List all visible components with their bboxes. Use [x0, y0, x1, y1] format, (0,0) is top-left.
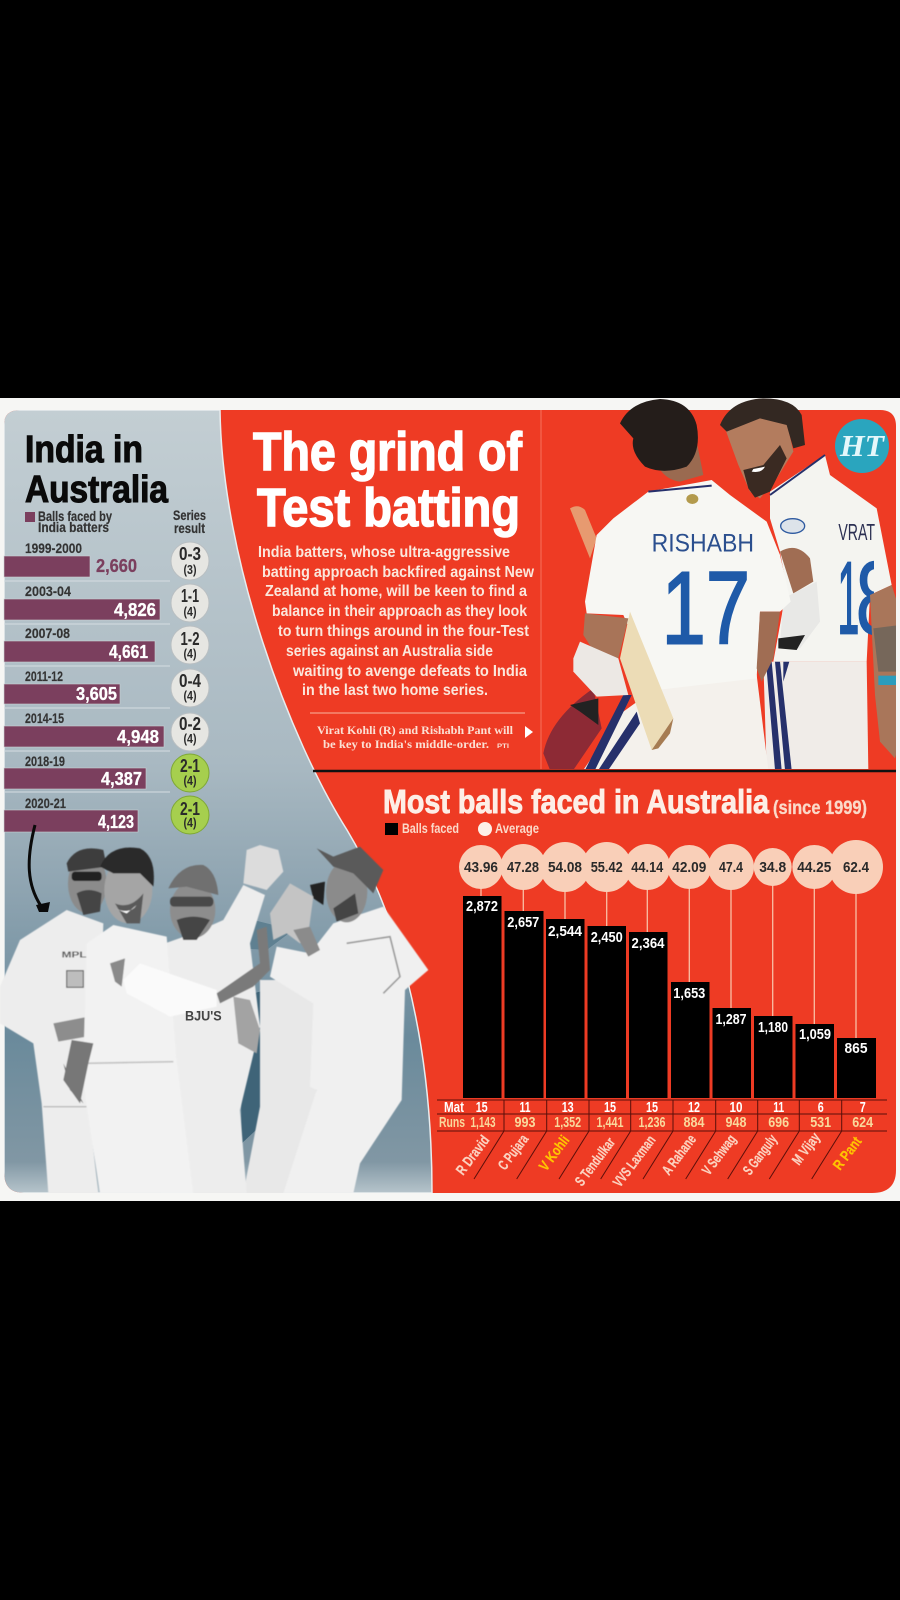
bar chart: balls faced [463, 896, 876, 1098]
arrow: from bars to players [29, 825, 50, 912]
bar chart: balls faced: 2,544 [548, 923, 583, 940]
series results [171, 542, 209, 834]
player names [453, 1130, 866, 1190]
text block: intro: waiting to avenge defeats to India [292, 663, 527, 680]
player names: S Tendulkar [572, 1135, 619, 1189]
player names: R Dravid [453, 1133, 493, 1178]
text block: intro: batting approach backfired against New [262, 564, 535, 581]
table: matches and runs: 11 [773, 1100, 784, 1116]
text block: intro: series against an Australia side [286, 643, 493, 660]
jersey number: 18: 1 [837, 539, 859, 655]
divider lines [540, 410, 542, 769]
average values: 34.8 [759, 859, 786, 876]
table: matches and runs: 7 [860, 1100, 866, 1116]
table: matches and runs: 6 [818, 1100, 824, 1116]
figure: Rishabh Pant: RISHABH [652, 530, 754, 558]
figure: Rishabh Pant [543, 399, 791, 770]
series results: 2-1 [180, 799, 200, 819]
table: matches and runs: 1,143 [470, 1115, 496, 1131]
panel: The grind of Test batting [253, 422, 535, 751]
heading: The grind of Test batting: The grind of [253, 422, 523, 482]
legend: series result: Series [173, 508, 206, 523]
average values: 54.08 [548, 859, 582, 876]
bar chart: balls faced by series: 2,660 [96, 555, 137, 576]
heading: India in Australia: Australia [25, 469, 169, 511]
figure: Rishabh Pant: 17 [662, 549, 750, 665]
panel: Most balls faced in Australia [383, 783, 887, 1190]
average values: 42.09 [672, 859, 706, 876]
heading: The grind of Test batting: Test batting [257, 478, 520, 538]
heading: India in Australia: India in [25, 429, 143, 471]
table: matches and runs: 948 [726, 1115, 746, 1131]
legend: chart [385, 821, 539, 836]
bar chart: balls faced by series: 4,661 [109, 641, 148, 662]
table: matches and runs: 15 [646, 1100, 658, 1116]
caption: photo [317, 725, 533, 751]
table: matches and runs: 531 [810, 1115, 831, 1131]
series results: (4) [184, 816, 196, 830]
series results: 1-1 [181, 586, 199, 606]
bar chart: balls faced by series: 2007-08 [25, 626, 70, 641]
bar chart: balls faced: 1,180 [758, 1019, 788, 1036]
bar chart: balls faced: 1,653 [673, 985, 705, 1002]
jersey number: 18 [840, 560, 874, 635]
panel: red background [4, 410, 896, 1193]
legend: chart: Balls faced [402, 821, 459, 836]
bar chart: balls faced by series: 2003-04 [25, 584, 71, 599]
legend: balls faced: Balls faced by [38, 509, 112, 524]
text block: intro: in the last two home series. [302, 682, 488, 699]
table: matches and runs: 993 [514, 1115, 536, 1131]
bar chart: balls faced by series: 3,605 [76, 683, 117, 704]
player names: VVS Laxman [610, 1133, 659, 1190]
series results: 2-1 [180, 756, 200, 776]
player names: R Pant [830, 1134, 866, 1173]
panel: grey left background [4, 410, 432, 1193]
table: matches and runs: Runs [439, 1115, 465, 1131]
bar chart: balls faced by series: 2020-21 [25, 796, 66, 811]
player names: V Kohli [536, 1133, 573, 1174]
bar chart: balls faced by series: 4,387 [101, 768, 142, 789]
figure: left player: MPL [62, 950, 87, 959]
heading: India in Australia [25, 429, 169, 511]
bar chart: balls faced by series [4, 541, 170, 832]
photo: India team celebrating [0, 845, 428, 1193]
player names: V Sehwag [699, 1132, 740, 1178]
bar chart: balls faced: 2,364 [632, 935, 665, 952]
table: matches and runs: 1,352 [554, 1115, 581, 1131]
figure: left player [0, 848, 107, 1193]
text block: intro: balance in their approach as they look [272, 603, 527, 620]
legend: series result [173, 508, 206, 536]
caption: photo: Virat Kohli (R) and Rishabh Pant will [317, 725, 513, 737]
table: matches and runs: 1,441 [596, 1115, 624, 1131]
figure: centre-right player [160, 845, 283, 1193]
series results: 0-4 [179, 671, 201, 691]
bubbles: average [459, 840, 883, 894]
player names: C Pujara [495, 1131, 533, 1173]
bar chart: balls faced: 865 [844, 1040, 868, 1057]
bar chart: balls faced by series: 2018-19 [25, 754, 65, 769]
table: matches and runs: 884 [684, 1115, 704, 1131]
bar chart: balls faced by series: 4,123 [98, 811, 134, 832]
table: matches and runs: 1,236 [638, 1115, 666, 1131]
bar chart: balls faced: 2,450 [591, 929, 623, 946]
average values: 47.28 [507, 859, 539, 876]
series results: (4) [184, 689, 196, 703]
bar chart: balls faced: 2,657 [507, 914, 539, 931]
series results: (4) [184, 647, 196, 661]
bar chart: balls faced by series: 2014-15 [25, 711, 64, 726]
player names: S Ganguly [740, 1132, 781, 1178]
text block: intro: to turn things around in the four-Test [278, 623, 529, 640]
table: matches and runs: 15 [476, 1100, 488, 1116]
text block: intro: India batters, whose ultra-aggressive [258, 544, 510, 561]
icon: HT logo [835, 419, 889, 473]
heading: The grind of Test batting [253, 422, 523, 538]
table: matches and runs: 624 [852, 1115, 873, 1131]
series results: 0-2 [179, 714, 201, 734]
connector lines [481, 885, 856, 1038]
bar chart: balls faced by series: 2011-12 [25, 669, 63, 684]
bar chart: balls faced: 2,872 [466, 898, 498, 915]
table: matches and runs [437, 1100, 887, 1179]
series results: (4) [184, 605, 196, 619]
series results: (3) [184, 563, 196, 577]
legend: balls faced: India batters [38, 520, 109, 535]
average values: 43.96 [464, 859, 498, 876]
average values: 62.4 [843, 859, 870, 876]
table: matches and runs: 15 [604, 1100, 616, 1116]
white page band [0, 398, 900, 1201]
heading: Most balls faced: (since 1999) [773, 798, 867, 819]
figure: centre bowler [63, 847, 270, 1193]
average values: 44.14 [631, 859, 664, 876]
figure: right player [270, 847, 428, 1193]
bar chart: balls faced by series: 4,948 [117, 726, 159, 747]
legend: series result: result [174, 521, 205, 536]
caption: photo: PTI [497, 743, 509, 750]
legend: chart: Average [495, 821, 539, 836]
figure: Virat Kohli [720, 398, 900, 770]
table: matches and runs: 12 [688, 1100, 700, 1116]
series results: (4) [184, 774, 196, 788]
player names: A Rahane [659, 1132, 700, 1178]
table: matches and runs: 13 [562, 1100, 574, 1116]
heading: Most balls faced: Most balls faced in Australia [383, 783, 770, 820]
figure: player at the back [243, 980, 317, 1193]
bar chart: balls faced: 1,287 [716, 1011, 746, 1028]
table: matches and runs: 10 [730, 1100, 742, 1116]
series results: (4) [184, 732, 196, 746]
text block: intro [258, 544, 535, 699]
bar chart: balls faced: 1,059 [799, 1026, 831, 1043]
player names: M Vijay [789, 1130, 824, 1168]
table: matches and runs: 696 [768, 1115, 789, 1131]
table: matches and runs: Mat [444, 1100, 464, 1116]
photo: India team celebrating: BJU'S [185, 1008, 222, 1024]
bar chart: balls faced by series: 1999-2000 [25, 541, 82, 556]
average values: 47.4 [719, 859, 744, 876]
text block: intro: Zealand at home, will be keen to find a [265, 583, 527, 600]
figure: Virat Kohli: VRAT [838, 519, 875, 545]
average values: 44.25 [797, 859, 831, 876]
average values: 55.42 [591, 859, 623, 876]
series results: 1-2 [180, 629, 200, 649]
panel: India in Australia [4, 429, 209, 834]
bar chart: balls faced by series: 4,826 [114, 599, 156, 620]
table: matches and runs: 11 [520, 1100, 530, 1116]
icon: HT logo: HT [839, 428, 885, 463]
photo: Rishabh Pant and Virat Kohli [543, 398, 900, 770]
legend: balls faced [25, 509, 112, 535]
series results: 0-3 [179, 544, 201, 564]
average values [464, 859, 870, 876]
caption: photo: be key to India's middle-order. [323, 739, 489, 751]
